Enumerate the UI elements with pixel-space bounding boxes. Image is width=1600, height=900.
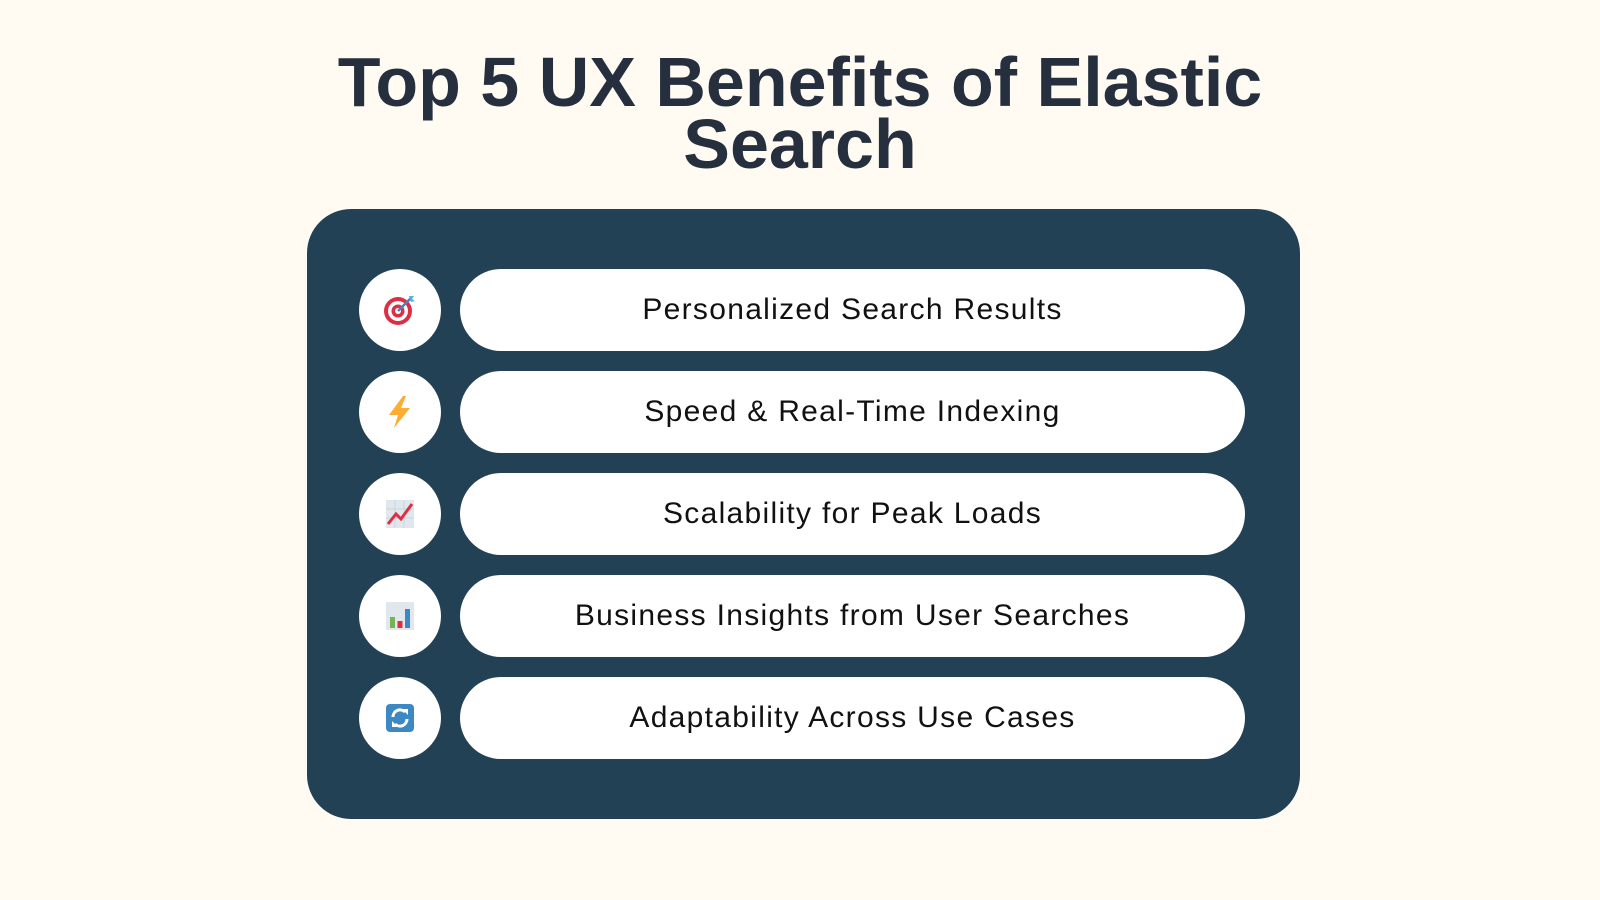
row 3 — [359, 473, 1245, 555]
pill text: Scalability for Peak Loads — [663, 497, 1042, 530]
icon: target — [359, 269, 441, 351]
pill text — [460, 371, 1245, 453]
pill text — [460, 677, 1245, 759]
icon: bar chart — [359, 575, 441, 657]
row 4 — [359, 575, 1245, 657]
row 2 — [359, 371, 1245, 453]
icon: trending chart — [359, 473, 441, 555]
row 5 — [359, 677, 1245, 759]
title — [338, 43, 1262, 183]
pill text — [460, 473, 1245, 555]
icon: lightning — [359, 371, 441, 453]
pill text: Adaptability Across Use Cases — [629, 701, 1076, 734]
pill text — [460, 575, 1245, 657]
row 1 — [359, 269, 1245, 351]
title: Search — [683, 105, 917, 183]
title: Top 5 UX Benefits of Elastic — [338, 43, 1262, 121]
pill text: Speed & Real-Time Indexing — [644, 395, 1061, 428]
icon: refresh — [359, 677, 441, 759]
panel: benefits list — [307, 209, 1300, 819]
pill text — [460, 269, 1245, 351]
pill text: Business Insights from User Searches — [575, 599, 1130, 632]
pill text: Personalized Search Results — [642, 293, 1063, 326]
